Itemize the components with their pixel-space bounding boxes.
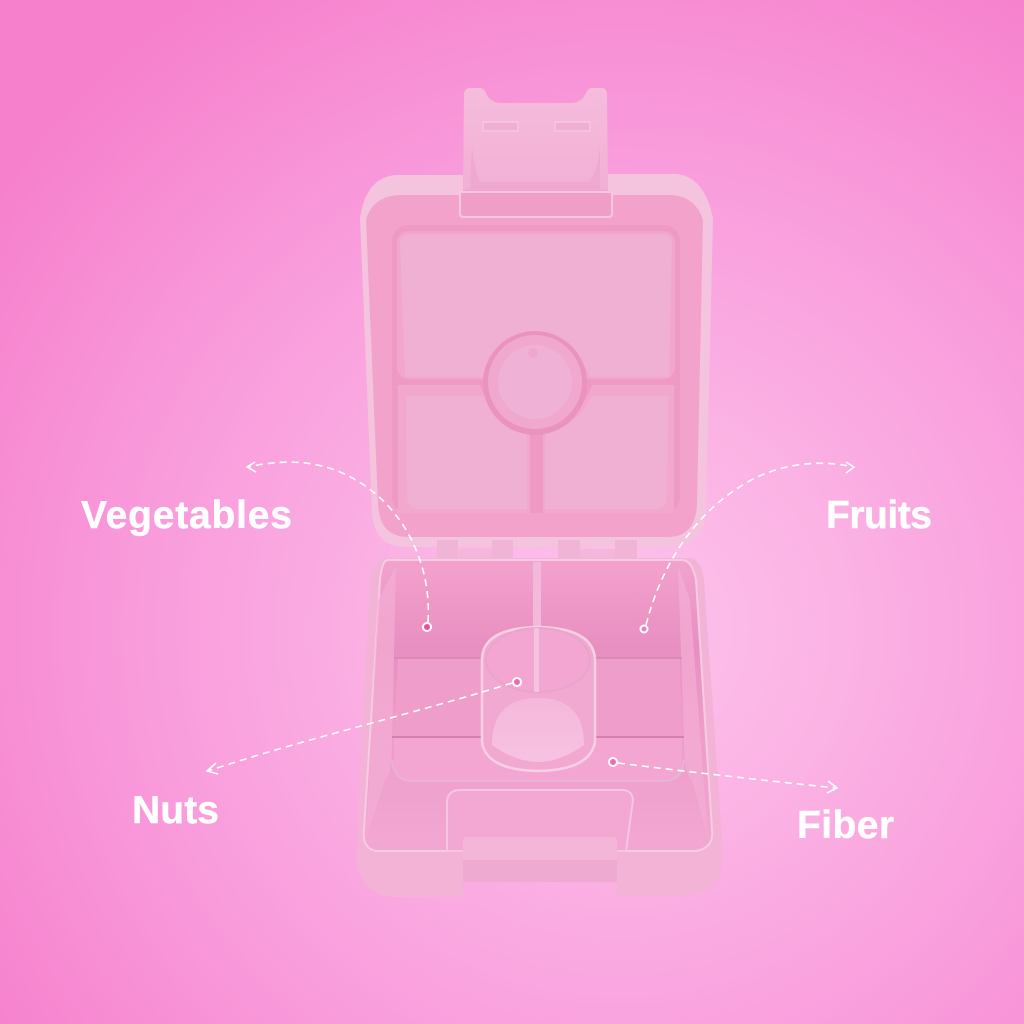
hinges xyxy=(437,540,637,563)
label: Fiber: Fiber xyxy=(797,804,894,847)
lid outer rim xyxy=(360,174,713,547)
lid panel top xyxy=(400,234,672,377)
lid interior xyxy=(366,195,703,537)
hinge slot xyxy=(460,192,612,217)
lid circle xyxy=(483,331,587,435)
right insert wall xyxy=(678,566,708,838)
label: Fruits: Fruits xyxy=(826,494,932,537)
lid clasp xyxy=(463,88,608,190)
open lid xyxy=(360,174,713,547)
front clasp xyxy=(463,837,617,860)
label: Vegetables: Vegetables xyxy=(81,494,292,537)
tray inner xyxy=(364,560,712,851)
lid panel bottom right xyxy=(545,396,668,509)
callout: vegetables line xyxy=(247,462,431,631)
callout: nuts line xyxy=(207,678,521,774)
lid recess xyxy=(392,225,680,513)
front compartment xyxy=(394,738,682,781)
middle compartments xyxy=(394,658,682,737)
lid margin bottom xyxy=(398,385,674,513)
callout: fiber line xyxy=(609,758,837,793)
small clear cup xyxy=(482,627,595,771)
upper divider xyxy=(533,562,541,628)
bottom notch tray xyxy=(447,790,633,851)
base tray xyxy=(357,558,722,897)
left insert wall xyxy=(366,566,396,838)
callout: fruits line xyxy=(640,462,854,632)
tray outer xyxy=(357,558,722,897)
lid panel bottom left xyxy=(406,396,527,509)
label: Nuts: Nuts xyxy=(132,789,219,832)
